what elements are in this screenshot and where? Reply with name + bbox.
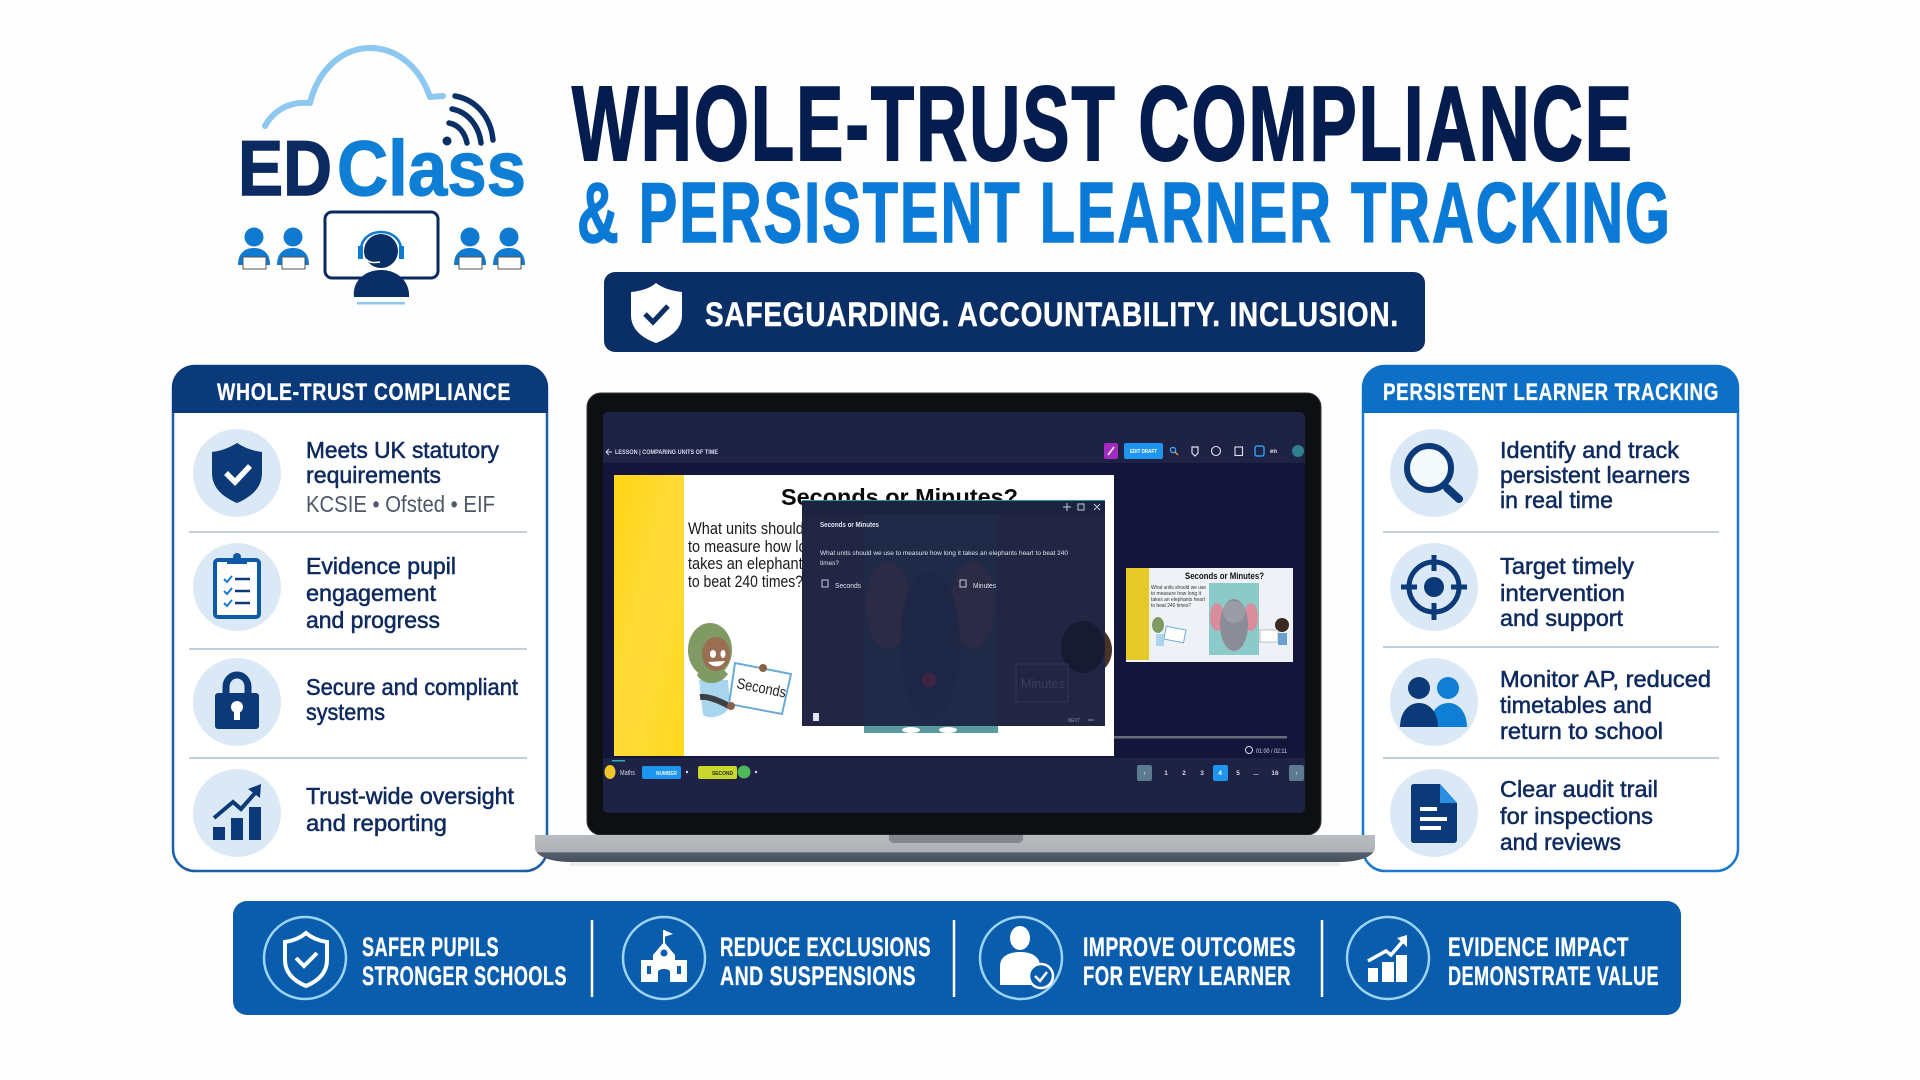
bottom toolbar: 3	[1200, 770, 1204, 777]
item: monitor AP: return to school	[1500, 718, 1663, 744]
lesson thumbnail: to beat 240 times?	[1151, 603, 1191, 609]
banner: safeguarding tagline	[604, 272, 1425, 352]
bottom toolbar: 5	[1236, 770, 1240, 777]
item: statutory requirements	[193, 429, 499, 517]
slide: seconds or minutes	[614, 475, 1114, 756]
panel header	[172, 365, 548, 413]
panel header: PERSISTENT LEARNER TRACKING	[1383, 379, 1719, 406]
laptop base	[535, 835, 1375, 866]
question overlay panel: NEXT	[1068, 718, 1081, 724]
item: audit trail: Clear audit trail	[1500, 776, 1658, 802]
benefit: improve outcomes: FOR EVERY LEARNER	[1083, 961, 1291, 991]
bottom toolbar: 2	[1182, 770, 1186, 777]
question overlay panel	[802, 500, 1105, 726]
benefit: evidence impact: DEMONSTRATE VALUE	[1448, 961, 1659, 991]
lesson thumbnail: Seconds or Minutes?	[1185, 571, 1264, 581]
item: trust-wide oversight: Trust-wide oversight	[306, 783, 514, 809]
item: evidence engagement	[193, 543, 456, 633]
item: trust-wide oversight: and reporting	[306, 810, 447, 836]
bottom toolbar: NUMBER	[656, 771, 677, 777]
item: audit trail: and reviews	[1500, 829, 1621, 855]
question overlay panel: Minutes	[1021, 676, 1065, 691]
bottom toolbar: 1	[1164, 770, 1168, 777]
lesson thumbnail: What units should we use	[1151, 585, 1206, 591]
icon: cloud outline	[265, 48, 443, 126]
progress and timer	[1114, 736, 1287, 755]
item: target intervention: intervention	[1500, 580, 1625, 606]
icon: white shield	[631, 283, 682, 343]
laptop bezel	[587, 393, 1321, 835]
item: secure systems: Secure and compliant	[306, 674, 518, 700]
item: target intervention: Target timely	[1500, 553, 1634, 579]
benefit: evidence impact: EVIDENCE IMPACT	[1448, 932, 1629, 962]
benefit: improve outcomes: IMPROVE OUTCOMES	[1083, 932, 1296, 962]
item: trust-wide oversight	[193, 769, 514, 857]
icon: teacher at screen with headset	[325, 212, 438, 304]
benefit: reduce exclusions: AND SUSPENSIONS	[720, 961, 916, 991]
bottom toolbar: ‹	[1143, 770, 1146, 777]
slide: seconds or minutes: to measure how long it	[688, 537, 834, 556]
item: evidence engagement: and progress	[306, 607, 440, 633]
bottom toolbar: SECOND	[712, 771, 733, 777]
panel: whole-trust compliance	[172, 365, 548, 871]
item: identify and track: persistent learners	[1500, 462, 1690, 488]
panel: persistent learner tracking	[1362, 365, 1739, 871]
item: evidence engagement: engagement	[306, 580, 436, 606]
slide: seconds or minutes: to beat 240 times?	[688, 572, 803, 591]
benefit: reduce exclusions: REDUCE EXCLUSIONS	[720, 932, 931, 962]
item: identify and track: Identify and track	[1500, 437, 1679, 463]
slide: seconds or minutes: Seconds or Minutes?	[781, 484, 1018, 510]
app top bar	[606, 443, 1304, 459]
app top bar: LESSON | COMPARING UNITS OF TIME	[615, 450, 718, 456]
benefit: reduce exclusions	[623, 917, 931, 999]
item: target intervention	[1390, 543, 1634, 631]
item: audit trail: for inspections	[1500, 803, 1653, 829]
benefit: safer pupils: STRONGER SCHOOLS	[362, 961, 567, 991]
icon: wifi signal	[442, 96, 493, 146]
question overlay panel: times?	[820, 560, 839, 567]
bottom toolbar: ›	[1295, 770, 1298, 777]
bottom toolbar	[604, 760, 1304, 781]
logo: EDClass	[238, 48, 526, 304]
item: monitor AP	[1390, 658, 1711, 746]
item: identify and track	[1390, 429, 1690, 517]
item: monitor AP: timetables and	[1500, 692, 1652, 718]
logo wordmark: Class	[337, 124, 526, 212]
laptop	[535, 393, 1375, 866]
item: statutory requirements: KCSIE • Ofsted • EIF	[306, 491, 495, 517]
benefit: safer pupils: SAFER PUPILS	[362, 932, 499, 962]
icon: four pupils with laptops	[238, 228, 525, 269]
panel header: WHOLE-TRUST COMPLIANCE	[217, 379, 511, 406]
slide: seconds or minutes: What units should we use	[688, 519, 854, 538]
logo wordmark: ED	[238, 124, 332, 212]
laptop screen: lesson app	[603, 412, 1305, 813]
app top bar: en	[1270, 449, 1277, 455]
illustration: elephant card base	[864, 726, 998, 733]
item: monitor AP: Monitor AP, reduced	[1500, 666, 1711, 692]
item: secure systems: systems	[306, 699, 385, 725]
bottom toolbar: Maths	[620, 770, 635, 777]
question overlay panel: Minutes	[973, 583, 996, 590]
question overlay panel: What units should we use to measure how long it takes an elephants heart to beat 240	[820, 550, 1068, 557]
bottom toolbar: 16	[1271, 770, 1279, 777]
benefit: safer pupils	[264, 917, 567, 999]
panel header	[1362, 365, 1739, 413]
item: target intervention: and support	[1500, 605, 1623, 631]
app top bar: EDIT DRAFT	[1130, 449, 1158, 455]
item: audit trail	[1390, 769, 1658, 857]
progress and timer: 01:00 / 02:11	[1256, 748, 1287, 755]
lesson thumbnail: takes an elephants heart	[1151, 597, 1205, 603]
illustration: girl holding Seconds sign: Seconds	[735, 675, 788, 701]
logo wordmark	[238, 124, 526, 212]
item: statutory requirements: Meets UK statutory	[306, 437, 499, 463]
illustration: boy head behind panel	[1105, 632, 1112, 668]
question overlay panel: Seconds or Minutes	[820, 522, 879, 529]
item: evidence engagement: Evidence pupil	[306, 553, 456, 579]
question overlay panel: Seconds	[835, 583, 861, 590]
lesson thumbnail	[1126, 568, 1293, 662]
title	[572, 65, 1672, 261]
illustration: girl holding Seconds sign	[688, 623, 791, 717]
tagline text: SAFEGUARDING. ACCOUNTABILITY. INCLUSION.	[705, 296, 1399, 334]
footer benefits bar	[233, 901, 1681, 1015]
bottom toolbar: 4	[1218, 770, 1222, 777]
lesson thumbnail: to measure how long it	[1151, 591, 1201, 597]
slide: seconds or minutes: takes an elephants heart	[688, 554, 847, 573]
bottom toolbar: ...	[1253, 770, 1259, 777]
item: identify and track: in real time	[1500, 487, 1613, 513]
item: secure systems	[193, 658, 518, 746]
item: statutory requirements: requirements	[306, 462, 441, 488]
benefit: improve outcomes	[980, 917, 1296, 999]
benefit: evidence impact	[1347, 917, 1659, 999]
